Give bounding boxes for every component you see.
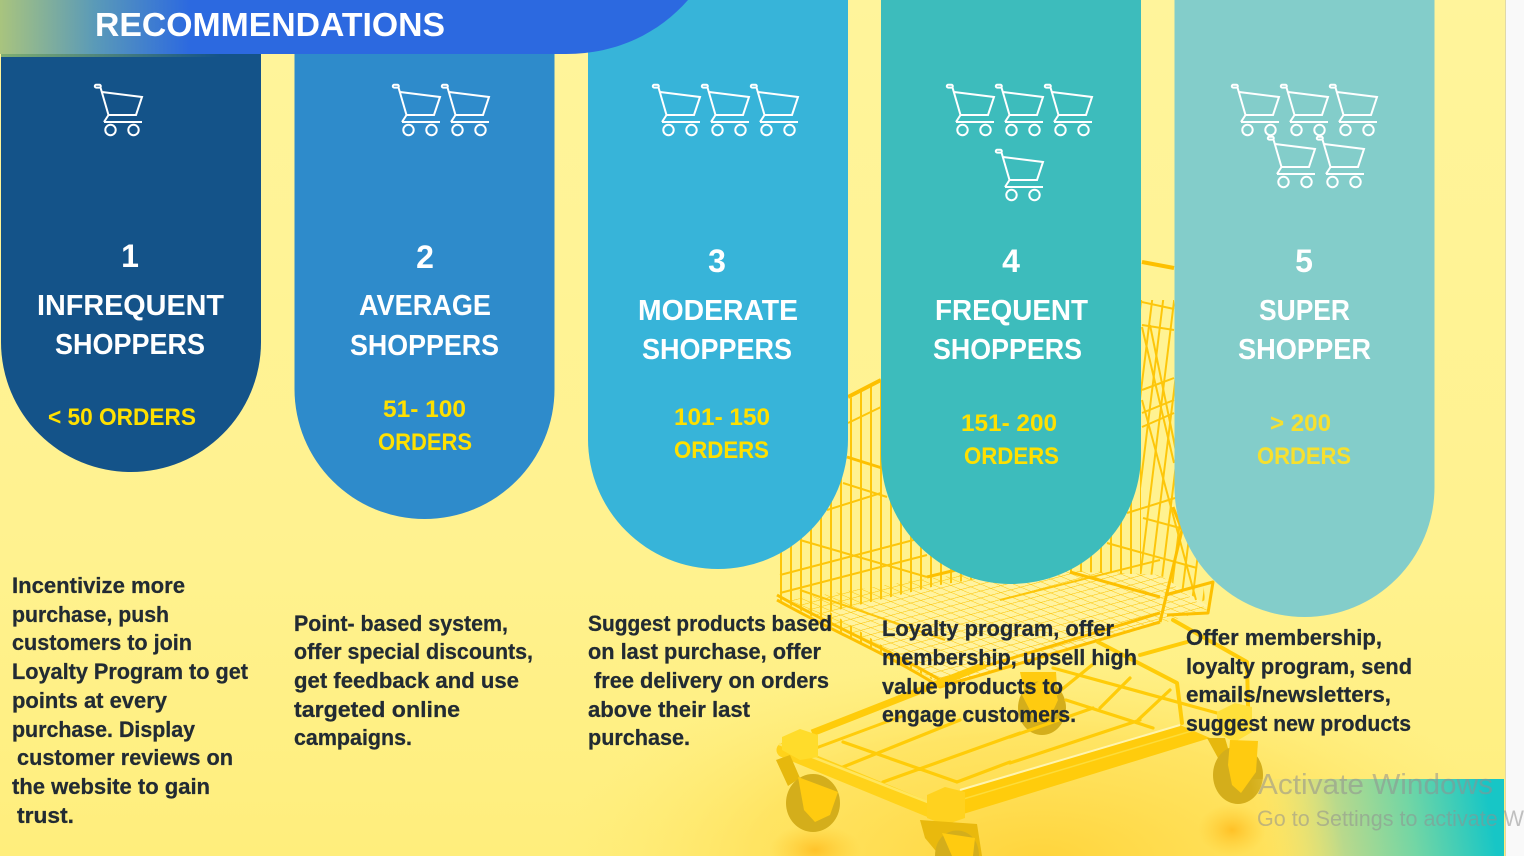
corner gradient block: [1240, 779, 1504, 856]
panel: average shoppers: [294, 40, 554, 519]
label: segment 3: 3: [708, 243, 726, 279]
text: recommendation for frequent shoppers: value products to: [882, 674, 1063, 699]
text: recommendation for average shoppers: campaigns.: [294, 725, 412, 750]
text: recommendation for infrequent shoppers: points at every: [12, 688, 168, 713]
text: recommendation for moderate shoppers: above their last: [588, 697, 751, 722]
icon: three carts: [653, 85, 798, 135]
text: recommendation for infrequent shoppers: purchase, push: [12, 602, 169, 627]
label: segment 5: 5: [1295, 243, 1313, 279]
text: recommendation for average shoppers: Point- based system,: [294, 611, 508, 636]
text: recommendation for moderate shoppers: purchase.: [588, 725, 690, 750]
label: segment 5: [1238, 243, 1371, 470]
panel: moderate shoppers: [588, 0, 848, 569]
undercarriage crossbars: [843, 665, 1217, 782]
basket wire walls: [777, 262, 1213, 687]
text: recommendation for moderate shoppers: Suggest products based: [588, 611, 832, 636]
rear wheel: [1018, 672, 1066, 735]
text: recommendation for infrequent shoppers: purchase. Display: [12, 717, 196, 742]
label: segment 2: SHOPPERS: [350, 330, 499, 362]
text: recommendation for infrequent shoppers: Loyalty Program to get: [12, 659, 249, 684]
watermark: activate windows: Activate Windows: [1258, 769, 1493, 801]
label: segment 1: 1: [121, 238, 139, 274]
label: segment 5: > 200: [1270, 410, 1331, 437]
text: recommendation for infrequent shoppers: Incentivize more: [12, 573, 185, 598]
text: recommendation for average shoppers: targeted online: [294, 697, 460, 722]
text: recommendation for infrequent shoppers: customers to join: [12, 630, 192, 655]
icon: two carts: [393, 85, 489, 135]
text: recommendation for infrequent shoppers: [12, 573, 249, 828]
label: segment 4: 151- 200: [961, 410, 1057, 437]
panel: super shopper: [1174, 0, 1434, 617]
icon: one cart: [95, 85, 142, 135]
text: recommendation for average shoppers: get feedback and use: [294, 668, 519, 693]
label: segment 1: INFREQUENT: [37, 290, 224, 322]
left rail: [812, 665, 985, 733]
front wheels: [776, 738, 1263, 856]
label: segment 2: AVERAGE: [359, 290, 491, 322]
header banner: [0, 0, 688, 54]
text: recommendation for infrequent shoppers: the website to gain: [12, 774, 210, 799]
icon: four carts: [947, 85, 1092, 200]
label: segment 3: MODERATE: [638, 295, 798, 327]
text: recommendation for average shoppers: [294, 611, 533, 750]
text: recommendation for super shopper: [1186, 625, 1412, 736]
text: recommendation for super shopper: emails/newsletters,: [1186, 682, 1391, 707]
label: segment 4: [933, 243, 1088, 470]
long side frame: [960, 725, 1210, 815]
label: segment 4: SHOPPERS: [933, 334, 1082, 366]
title: RECOMMENDATIONS: [95, 6, 445, 43]
text: recommendation for average shoppers: offer special discounts,: [294, 639, 533, 664]
label: segment 3: ORDERS: [674, 437, 769, 464]
text: recommendation for super shopper: loyalty program, send: [1186, 654, 1412, 679]
icon: five carts: [1232, 85, 1377, 187]
label: segment 2: [350, 239, 499, 456]
label: segment 4: ORDERS: [964, 443, 1059, 470]
label: segment 3: [638, 243, 798, 464]
label: segment 2: 51- 100: [383, 396, 466, 423]
panel: infrequent shoppers: [1, 54, 261, 472]
label: segment 5: SUPER: [1259, 295, 1350, 327]
label: segment 2: ORDERS: [378, 429, 472, 456]
text: recommendation for moderate shoppers: [588, 611, 832, 750]
corner blocks: [782, 729, 818, 760]
text: recommendation for frequent shoppers: Loyalty program, offer: [882, 616, 1114, 641]
label: segment 2: 2: [416, 239, 434, 275]
label: segment 1: SHOPPERS: [55, 329, 205, 361]
front frame: [784, 750, 930, 810]
text: recommendation for frequent shoppers: engage customers.: [882, 702, 1076, 727]
label: segment 4: 4: [1002, 243, 1020, 279]
text: recommendation for moderate shoppers: free delivery on orders: [594, 668, 829, 693]
text: recommendation for infrequent shoppers: trust.: [17, 803, 74, 828]
text: recommendation for super shopper: suggest new products: [1186, 711, 1411, 736]
text: recommendation for frequent shoppers: membership, upsell high: [882, 645, 1137, 670]
label: segment 4: FREQUENT: [935, 295, 1088, 327]
label: segment 1: < 50 ORDERS: [48, 404, 196, 431]
label: segment 3: SHOPPERS: [642, 334, 792, 366]
label: segment 1: [37, 238, 224, 431]
panel: frequent shoppers: [881, 0, 1141, 584]
label: segment 5: ORDERS: [1257, 443, 1351, 470]
watermark: activate windows: [1257, 769, 1524, 831]
text: recommendation for moderate shoppers: on last purchase, offer: [588, 639, 821, 664]
chassis frame: [779, 620, 1252, 825]
text: recommendation for frequent shoppers: [882, 616, 1137, 727]
handle supports: [1098, 620, 1248, 723]
shopping cart photo illustration: [776, 262, 1263, 856]
watermark: activate windows: Go to Settings to activate W: [1257, 806, 1524, 831]
label: segment 3: 101- 150: [674, 404, 770, 431]
text: recommendation for super shopper: Offer membership,: [1186, 625, 1382, 650]
text: recommendation for infrequent shoppers: customer reviews on: [17, 745, 233, 770]
label: segment 5: SHOPPER: [1238, 334, 1371, 366]
